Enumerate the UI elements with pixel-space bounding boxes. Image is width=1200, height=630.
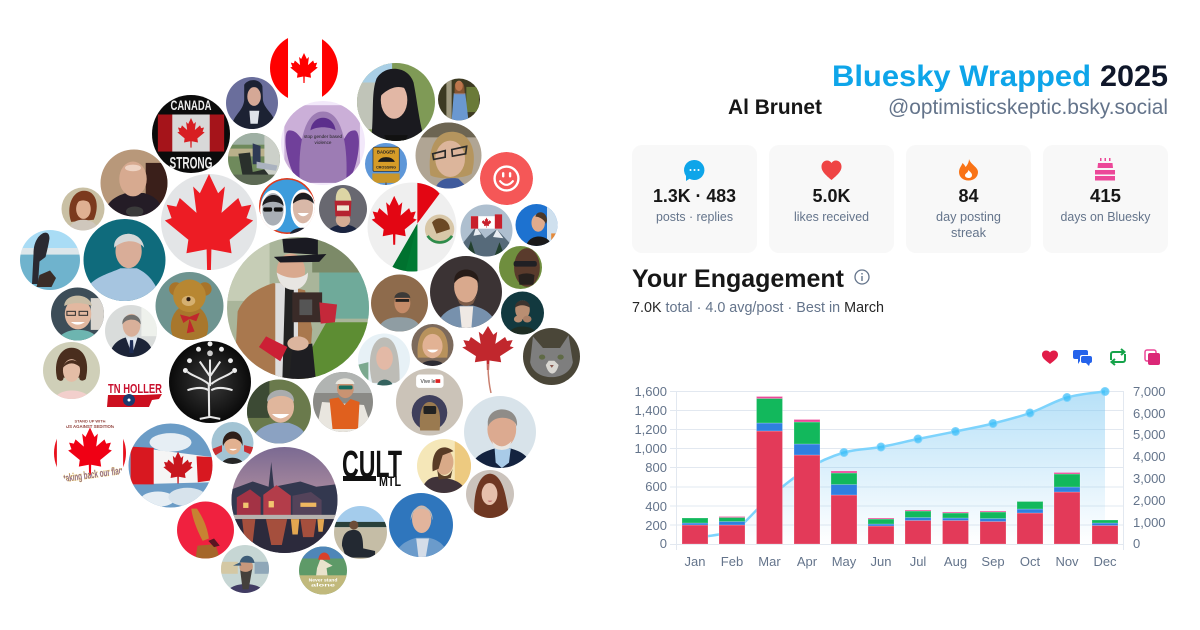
left axis labels: 0 bbox=[660, 536, 667, 551]
avatar: grey haired man in navy bbox=[464, 396, 536, 468]
avatar: dog in red hat painting: Never stand bbox=[309, 578, 338, 583]
avatar: man against blue screen bbox=[516, 204, 558, 246]
avatar: waving flag in cloudy sky bbox=[128, 424, 212, 508]
bars: January bbox=[682, 518, 708, 544]
icon: flame bbox=[959, 159, 978, 180]
right axis labels: 0 bbox=[1133, 536, 1140, 551]
stat card: posting streak: streak bbox=[951, 225, 986, 240]
bars: September bbox=[980, 511, 1006, 544]
stat card: posts and replies: 1.3K · 483 bbox=[653, 186, 736, 206]
avatar: woman with brown bob bbox=[43, 342, 100, 399]
avatar: woman with short dark hair bbox=[212, 422, 254, 464]
logo: Cult MTL: MTL bbox=[379, 473, 401, 489]
avatar: Vive le Canada selfie: Vive le bbox=[420, 379, 436, 385]
left axis labels: 1,000 bbox=[634, 441, 667, 456]
stat card: likes received: 5.0K bbox=[812, 186, 850, 206]
bars: October bbox=[1017, 502, 1043, 544]
avatar: man sitting on beach bbox=[334, 506, 387, 559]
month labels: Jan bbox=[685, 554, 705, 569]
avatar: person on lawn chair bbox=[228, 133, 280, 185]
icon: chat bubble bbox=[684, 160, 704, 181]
cumulative area bbox=[695, 392, 1105, 544]
avatar: man in tall guard hat bbox=[319, 185, 367, 233]
bars: April bbox=[794, 420, 820, 544]
left axis labels: 800 bbox=[645, 460, 667, 475]
cumulative line bbox=[695, 392, 1105, 538]
avatar: man with cap and glasses bbox=[51, 288, 104, 340]
bars: August bbox=[942, 512, 968, 544]
title: 2025 bbox=[1100, 60, 1168, 93]
stat card: likes received bbox=[769, 145, 894, 253]
avatar: grey tabby cat bbox=[523, 328, 580, 385]
stat card: posts and replies bbox=[632, 145, 757, 253]
icon: textured red maple leaf bbox=[462, 326, 514, 393]
avatar: bearded man in cap selfie bbox=[221, 545, 269, 593]
avatar: man with dark sunglasses bbox=[499, 246, 542, 289]
left axis labels: 400 bbox=[645, 499, 667, 514]
avatar: red smiley default bbox=[480, 152, 533, 205]
avatar: dog in red hat painting: alone bbox=[311, 582, 337, 587]
bars: July bbox=[905, 510, 931, 544]
stat card: days on Bluesky: 415 bbox=[1090, 186, 1121, 206]
avatar: dark haired woman bbox=[357, 63, 435, 141]
avatar bubble cluster bbox=[20, 34, 580, 594]
stacked bars bbox=[682, 396, 1118, 544]
avatar: Vive le Canada selfie bbox=[396, 368, 463, 436]
avatar: woman with long auburn hair bbox=[466, 470, 514, 518]
avatar: Canada and Mexico flag blend bbox=[368, 182, 456, 272]
left axis labels: 1,400 bbox=[634, 403, 667, 418]
logo: Cult MTL bbox=[342, 444, 402, 489]
title: Bluesky Wrapped bbox=[832, 60, 1091, 93]
logo: TN Holler bbox=[107, 382, 162, 407]
month labels: Nov bbox=[1055, 554, 1079, 569]
month labels: Feb bbox=[721, 554, 743, 569]
avatar: taking back our flag bbox=[54, 417, 126, 489]
handle: @optimisticskeptic.bsky.social bbox=[888, 96, 1168, 119]
avatar: Canada Strong badge bbox=[152, 95, 230, 173]
avatar: smiling man in plaid shirt bbox=[247, 380, 311, 444]
grid lines bbox=[670, 391, 1124, 550]
month labels: Sep bbox=[981, 554, 1005, 569]
stat card: likes received: likes received bbox=[794, 209, 869, 224]
chart legend icons bbox=[1042, 349, 1160, 366]
display name: Al Brunet bbox=[728, 96, 822, 119]
icon: birthday cake bbox=[1095, 158, 1115, 180]
avatar: silver haired woman bbox=[358, 334, 410, 386]
right axis labels: 2,000 bbox=[1133, 493, 1166, 508]
logo: Cult MTL: CULT bbox=[342, 444, 402, 486]
avatar: Canada Strong badge: STRONG bbox=[170, 154, 212, 172]
avatar: woman in blue dress bbox=[438, 78, 480, 120]
avatar: badger crossing sign bbox=[365, 143, 407, 186]
avatar: purple hair with ribbon bbox=[281, 101, 365, 185]
icon: like bbox=[1042, 350, 1058, 364]
stat card: posts and replies: posts · replies bbox=[656, 209, 733, 224]
logo: TN Holler: TN HOLLER bbox=[108, 382, 162, 396]
left axis labels: 200 bbox=[645, 518, 667, 533]
left axis labels bbox=[634, 384, 667, 551]
engagement heading: Your Engagement bbox=[632, 265, 845, 293]
avatar: man on blue backdrop bbox=[389, 493, 453, 557]
avatar: gold statue on red bbox=[177, 502, 234, 558]
avatar: Canadian flag top bbox=[270, 38, 338, 98]
avatar: Canada Strong badge: CANADA bbox=[171, 97, 211, 113]
icon: info bbox=[855, 270, 869, 284]
month labels: Mar bbox=[758, 554, 781, 569]
bars: February bbox=[719, 516, 745, 544]
avatar: taking back our flag: US AGAINST SEDITION bbox=[66, 424, 114, 429]
avatar: man with hands to face bbox=[501, 292, 544, 334]
right axis labels: 7,000 bbox=[1133, 384, 1166, 399]
right axis labels: 3,000 bbox=[1133, 471, 1166, 486]
month labels bbox=[685, 554, 1117, 569]
icon: reposts bbox=[1111, 349, 1125, 365]
stat card: posting streak: 84 bbox=[958, 186, 978, 206]
month labels: May bbox=[832, 554, 857, 569]
stat card: posting streak bbox=[906, 145, 1031, 253]
avatar: badger crossing sign: BADGER bbox=[377, 150, 395, 155]
avatar: man in dark hoodie bbox=[226, 77, 278, 129]
bars: June bbox=[868, 518, 894, 544]
right axis labels: 5,000 bbox=[1133, 427, 1166, 442]
avatar: smiling blonde woman bbox=[412, 324, 454, 366]
line points bbox=[840, 388, 1109, 456]
month labels: Aug bbox=[944, 554, 967, 569]
left axis labels: 600 bbox=[645, 479, 667, 494]
month labels: Jun bbox=[871, 554, 891, 569]
avatar: white tree of Gondor bbox=[169, 341, 251, 423]
bars: November bbox=[1054, 472, 1080, 544]
right axis labels bbox=[1133, 384, 1166, 551]
avatar: purple hair with ribbon: violence bbox=[315, 140, 332, 145]
right axis labels: 6,000 bbox=[1133, 406, 1166, 421]
icon: quotes bbox=[1145, 350, 1160, 365]
avatar: woman with auburn hair bbox=[62, 188, 104, 230]
month labels: Jul bbox=[910, 554, 926, 569]
avatar: man with top hat and camera bbox=[227, 237, 369, 379]
avatar: bearded man in profile bbox=[417, 439, 471, 493]
avatar: man in light blue shirt bbox=[84, 219, 166, 301]
left axis labels: 1,200 bbox=[634, 422, 667, 437]
bars: March bbox=[756, 396, 782, 544]
avatar: man in grey shirt bbox=[371, 274, 428, 332]
avatar: woman with glasses bbox=[416, 122, 482, 188]
avatar: purple hair with ribbon: stop gender based bbox=[304, 134, 343, 139]
avatar: big red maple leaf bbox=[161, 174, 257, 270]
avatar: taking back our flag: taking back our flag bbox=[63, 465, 123, 485]
bars: December bbox=[1092, 520, 1118, 544]
avatar: badger crossing sign: CROSSING bbox=[376, 166, 396, 170]
avatar: man in navy suit bbox=[105, 305, 157, 357]
month labels: Apr bbox=[797, 554, 818, 569]
avatar: taking back our flag: STAND UP WITH bbox=[74, 418, 106, 423]
avatar: harbour town at dusk bbox=[232, 447, 338, 553]
engagement summary: 7.0K total · 4.0 avg/post · Best in March bbox=[632, 300, 884, 316]
avatar: silhouette at the shore bbox=[20, 230, 80, 291]
month labels: Oct bbox=[1020, 554, 1040, 569]
icon: heart bbox=[822, 160, 842, 180]
icon: replies bbox=[1073, 350, 1092, 366]
avatar: young man in blue blazer bbox=[430, 256, 502, 328]
avatar: dog in red hat painting bbox=[299, 546, 347, 594]
engagement chart bbox=[634, 384, 1166, 569]
left axis labels: 1,600 bbox=[634, 384, 667, 399]
right axis labels: 4,000 bbox=[1133, 449, 1166, 464]
stat card: days on Bluesky bbox=[1043, 145, 1168, 253]
avatar: man in orange life vest bbox=[313, 372, 373, 432]
right axis labels: 1,000 bbox=[1133, 515, 1166, 530]
avatar: flag over mountains bbox=[460, 204, 512, 256]
stat card: posting streak: day posting bbox=[936, 209, 1001, 224]
avatar: two men cutout bbox=[259, 178, 315, 234]
avatar: teddy bear bbox=[156, 272, 224, 340]
month labels: Dec bbox=[1093, 554, 1117, 569]
bars: May bbox=[831, 471, 857, 544]
stat card: days on Bluesky: days on Bluesky bbox=[1060, 209, 1151, 224]
avatar: bald man bbox=[100, 150, 168, 216]
